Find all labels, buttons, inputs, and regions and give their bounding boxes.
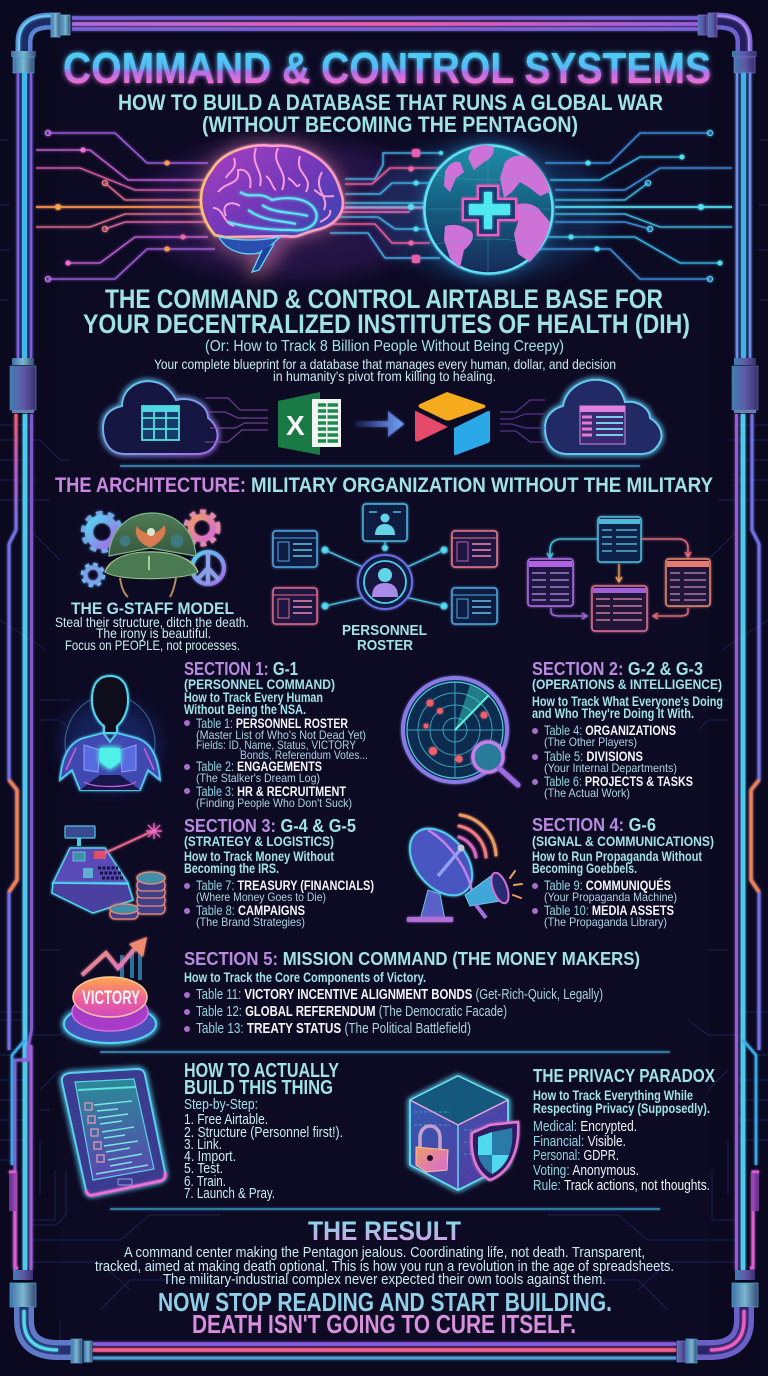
text: the g-staff model: Steal their structure, ditch the death. <box>55 614 249 630</box>
linked table left <box>528 559 573 606</box>
section 3 text: (The Brand Strategies) <box>196 915 305 929</box>
section 3 text: (Where Money Goes to Die) <box>196 890 326 904</box>
top rail <box>72 18 698 29</box>
section 1 text: Bonds, Referendum Votes... <box>240 748 368 762</box>
icon: airtable logo <box>415 392 490 455</box>
left pipes <box>9 73 36 1270</box>
heading: the result: THE RESULT <box>308 1216 461 1246</box>
section 1 text: (Master List of Who's Not Dead Yet) <box>196 728 366 742</box>
card top left <box>273 531 317 567</box>
privacy paradox text: Rule: Track actions, not thoughts. <box>533 1177 710 1194</box>
heading: airtable base <box>83 284 690 339</box>
section 2 text: SECTION 2: G-2 & G-3 <box>532 659 703 679</box>
bullets <box>532 728 538 785</box>
bottom-left elbow <box>10 1270 92 1363</box>
diagram: personnel roster hub <box>273 504 497 654</box>
heading: airtable base: THE COMMAND & CONTROL AIRTABLE BASE FOR <box>105 284 663 314</box>
section 4 text: (The Propaganda Library) <box>544 915 667 929</box>
linked table top <box>598 517 641 562</box>
circuit traces: right <box>540 130 732 282</box>
text: result summary: A command center making the Pentagon jealous. Coordinating life, not death. Transparent, <box>124 1244 645 1261</box>
section 2 text: (OPERATIONS & INTELLIGENCE) <box>532 676 722 692</box>
icon: victory button with rising arrow: VICTORY <box>82 988 140 1009</box>
section 1 text: (Finding People Who Don't Suck) <box>196 796 352 810</box>
how to build text <box>184 1060 343 1202</box>
label: personnel roster: ROSTER <box>357 637 413 654</box>
text: the g-staff model: Focus on PEOPLE, not processes. <box>65 637 240 653</box>
label: personnel roster <box>342 622 427 654</box>
icon: victory button with rising arrow <box>64 937 156 1043</box>
subtitle <box>118 90 663 137</box>
section 5 text: Table 13: TREATY STATUS (The Political Battlefield) <box>196 1021 471 1037</box>
bullets <box>184 883 190 914</box>
section 4 text: Becoming Goebbels. <box>532 860 637 876</box>
section 2 text: and Who They're Doing It With. <box>532 705 694 721</box>
call to action <box>158 1287 612 1339</box>
heading: the architecture: THE ARCHITECTURE: <box>55 474 246 497</box>
diagram: linked tables <box>528 517 710 631</box>
section 3 text <box>184 816 374 929</box>
icon: left cloud with table <box>103 381 268 454</box>
section 3 text: Becoming the IRS. <box>184 860 279 876</box>
how to build text: 5. Test. <box>184 1161 223 1177</box>
section 1 text: Fields: ID, Name, Status, VICTORY <box>196 738 356 752</box>
top-left elbow <box>11 13 70 73</box>
section 1 text: Table 3: HR & RECRUITMENT <box>196 784 347 799</box>
privacy paradox text: Financial: Visible. <box>533 1133 626 1150</box>
circuit nodes: right <box>568 154 722 266</box>
linked table right <box>666 559 710 606</box>
tagline: (Or: How to Track 8 Billion People Without Being Creepy) <box>205 338 564 355</box>
icon: excel logo <box>278 392 341 455</box>
call to action: DEATH ISN'T GOING TO CURE ITSELF. <box>192 1309 576 1339</box>
linked table bottom <box>592 586 647 631</box>
how to build text: 1. Free Airtable. <box>184 1112 268 1128</box>
text: result summary <box>95 1244 674 1288</box>
section 4 text <box>532 815 714 929</box>
section 4 text: Table 10: MEDIA ASSETS <box>544 903 674 918</box>
section 3 text: Table 7: TREASURY (FINANCIALS) <box>196 878 374 893</box>
section 2 text: (The Other Players) <box>544 735 637 749</box>
section 2 text: Table 4: ORGANIZATIONS <box>544 723 676 738</box>
section 1 text: (The Stalker's Dream Log) <box>196 771 320 785</box>
connectors <box>322 541 447 609</box>
section 2 text: Table 5: DIVISIONS <box>544 749 643 764</box>
section 2 text: (Your Internal Departments) <box>544 761 677 775</box>
privacy paradox text: How to Track Everything While <box>533 1087 693 1103</box>
heading: the architecture <box>55 474 713 497</box>
icon: helmet, gears and peace sign <box>83 512 224 597</box>
section 5 text: Table 11: VICTORY INCENTIVE ALIGNMENT BONDS (Get-Rich-Quick, Legally) <box>196 987 603 1003</box>
text: result summary: tracked, aimed at making death optional. This is how you run a revolution in the age of spreadsheets. <box>95 1258 674 1275</box>
icon: gears <box>83 512 218 585</box>
section 1 text <box>184 659 368 810</box>
how to build text: BUILD THIS THING <box>184 1077 333 1099</box>
section 4 text: (SIGNAL & COMMUNICATIONS) <box>532 833 714 849</box>
icon: satellite dish and megaphone <box>397 815 522 922</box>
right pipes <box>732 73 759 1270</box>
how to build text: 7. Launch & Pray. <box>184 1186 275 1202</box>
bullets <box>184 992 190 1032</box>
heading: the architecture: MILITARY ORGANIZATION WITHOUT THE MILITARY <box>251 474 713 497</box>
card bottom right <box>452 588 497 624</box>
section 3 text: Table 8: CAMPAIGNS <box>196 903 305 918</box>
section 1 text: SECTION 1: G-1 <box>184 659 298 679</box>
bottom rail <box>93 1344 676 1358</box>
section 4 text: (Your Propaganda Machine) <box>544 890 677 904</box>
label: personnel roster: PERSONNEL <box>342 622 427 639</box>
icon: data cube with lock and shield <box>410 1076 518 1190</box>
how to build text: Step-by-Step: <box>184 1097 258 1113</box>
card bottom left <box>273 588 317 624</box>
how to build text: HOW TO ACTUALLY <box>184 1060 340 1082</box>
text: the g-staff model <box>55 599 249 653</box>
section 2 text: (The Actual Work) <box>544 786 630 800</box>
icon: peace sign <box>192 552 224 584</box>
circuit traces: brain to globe <box>318 153 440 258</box>
circuit nodes: brain to globe <box>408 149 443 263</box>
section 5 text: How to Track the Core Components of Victory. <box>184 969 426 985</box>
subtitle: (WITHOUT BECOMING THE PENTAGON) <box>202 112 578 137</box>
privacy paradox text: Respecting Privacy (Supposedly). <box>533 1100 710 1116</box>
card top right <box>452 531 497 567</box>
section 1 text: Without Being the NSA. <box>184 701 306 717</box>
icon: tablet checklist <box>62 1069 165 1195</box>
privacy paradox text: Voting: Anonymous. <box>533 1162 639 1179</box>
circuit nodes: left <box>55 148 186 266</box>
top card <box>363 504 407 541</box>
arrow: excel to airtable <box>355 411 404 437</box>
tagline: Your complete blueprint for a database that manages every human, dollar, and decision <box>154 356 616 372</box>
icon: right cloud with table <box>500 380 662 454</box>
subtitle: HOW TO BUILD A DATABASE THAT RUNS A GLOBAL WAR <box>118 90 663 115</box>
how to build text: 6. Train. <box>184 1174 226 1190</box>
section 1 text: (PERSONNEL COMMAND) <box>184 676 335 692</box>
icon: armored human silhouette <box>60 676 160 790</box>
section 5 text <box>184 949 640 1037</box>
icon: excel logo: X <box>286 410 305 441</box>
privacy paradox text: Medical: Encrypted. <box>533 1118 637 1135</box>
privacy paradox text: Personal: GDPR. <box>533 1147 619 1164</box>
icon: brain <box>201 145 343 272</box>
section 1 text: Table 1: PERSONNEL ROSTER <box>196 716 348 731</box>
section 3 text: How to Track Money Without <box>184 848 334 864</box>
bottom-right elbow <box>677 1270 758 1363</box>
text: the g-staff model: THE G-STAFF MODEL <box>71 599 234 618</box>
text: the g-staff model: The irony is beautiful. <box>96 625 211 641</box>
icon: radar with magnifier <box>403 678 518 785</box>
bullets <box>184 720 190 794</box>
section 3 text: SECTION 3: G-4 & G-5 <box>184 816 356 836</box>
section 1 text: Table 2: ENGAGEMENTS <box>196 759 322 774</box>
call to action: NOW STOP READING AND START BUILDING. <box>158 1287 612 1317</box>
section 4 text: Table 9: COMMUNIQUÉS <box>544 878 671 893</box>
how to build text: 2. Structure (Personnel first!). <box>184 1125 343 1141</box>
top-right elbow <box>698 13 757 73</box>
tagline <box>154 338 616 384</box>
section 2 text: Table 6: PROJECTS & TASKS <box>544 774 693 789</box>
tagline: in humanity's pivot from killing to healing. <box>273 368 496 384</box>
section 5 text: Table 12: GLOBAL REFERENDUM (The Democratic Facade) <box>196 1004 507 1020</box>
circuit traces: left <box>36 130 218 282</box>
bullets <box>532 883 538 914</box>
privacy paradox text: THE PRIVACY PARADOX <box>533 1066 715 1086</box>
section 4 text: SECTION 4: G-6 <box>532 815 656 835</box>
text: result summary: The military-industrial complex never expected their own tools against them. <box>163 1271 606 1288</box>
how to build text: 4. Import. <box>184 1149 236 1165</box>
section 5 text: SECTION 5: MISSION COMMAND (THE MONEY MAKERS) <box>184 949 640 969</box>
central person <box>358 555 412 609</box>
section 3 text: (STRATEGY & LOGISTICS) <box>184 833 334 849</box>
section 1 text: How to Track Every Human <box>184 689 323 705</box>
privacy paradox text <box>533 1066 715 1194</box>
how to build text: 3. Link. <box>184 1137 222 1153</box>
arrows between tables <box>547 539 691 619</box>
section 4 text: How to Run Propaganda Without <box>532 848 702 864</box>
section 2 text <box>532 659 723 800</box>
icon: cash register with laser <box>52 823 165 919</box>
icon: globe with medical cross <box>424 144 554 274</box>
